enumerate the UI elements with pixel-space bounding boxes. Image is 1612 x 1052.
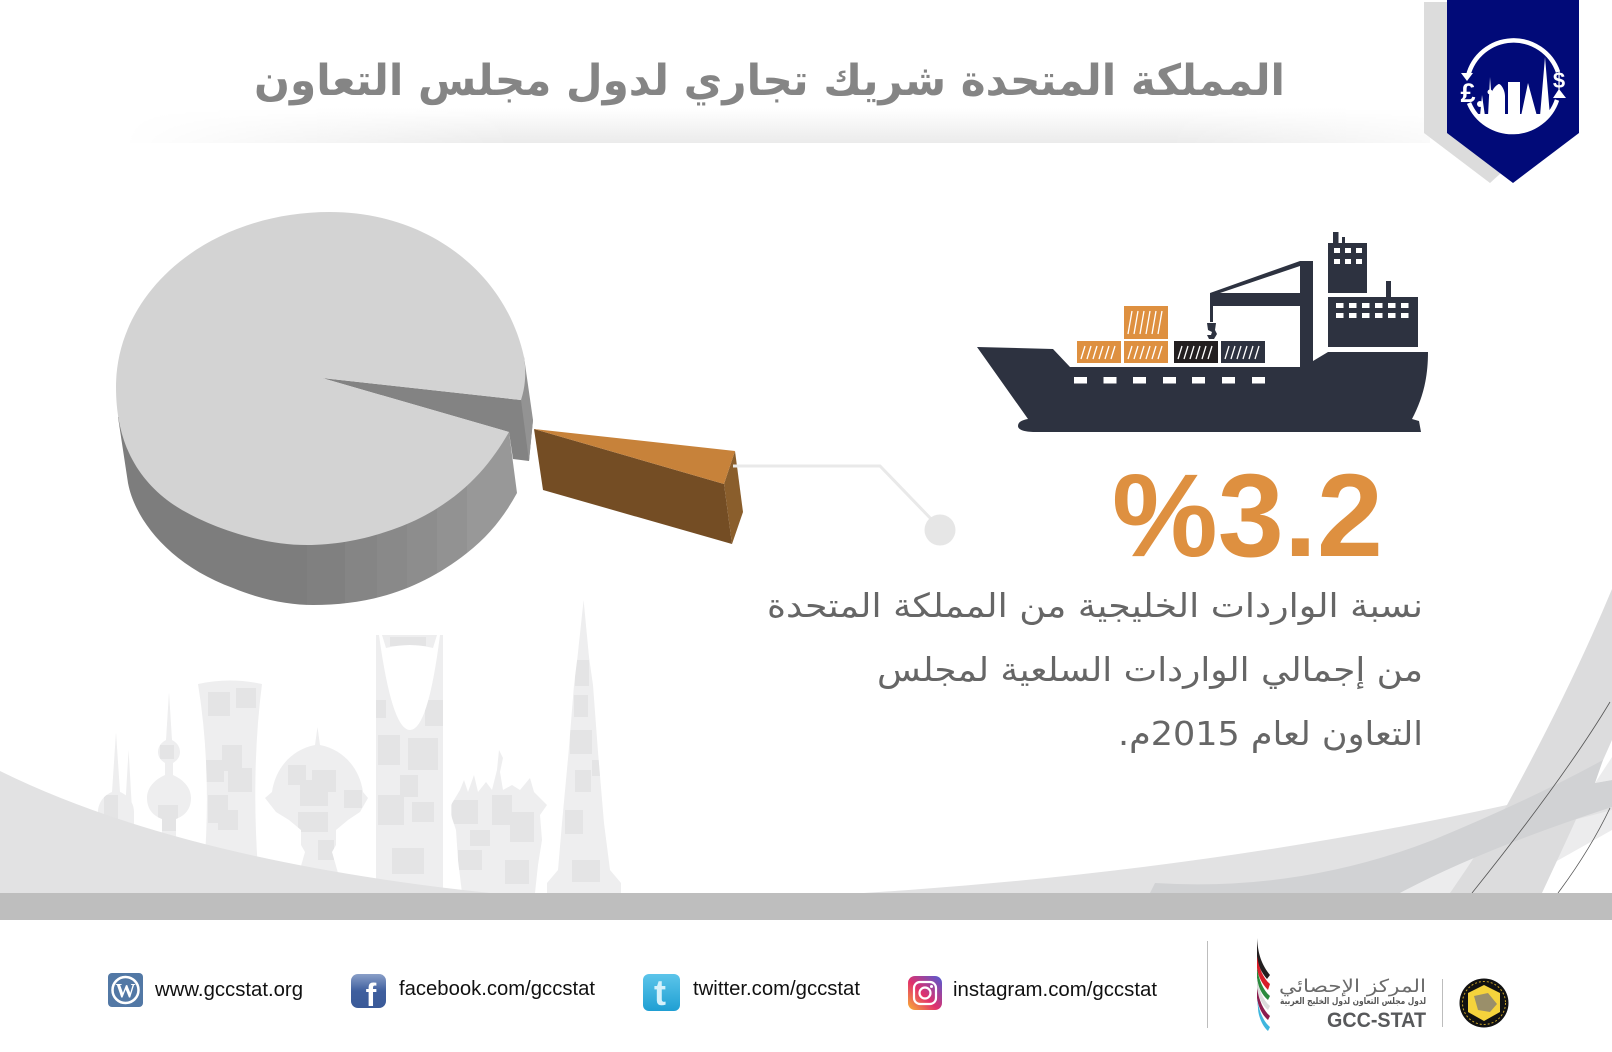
logo ribbons: [1257, 938, 1270, 1031]
pie chart: [116, 212, 743, 605]
description text: نسبة الواردات الخليجية من المملكة المتحدة: [767, 586, 1423, 625]
icon: skyline with trade arrows: £: [1460, 78, 1476, 108]
footer social links: [108, 972, 1157, 1013]
title: المملكة المتحدة شريك تجاري لدول مجلس التعاون: [254, 56, 1285, 106]
pie top surface: [116, 212, 525, 545]
logo arabic subtitle: لدول مجلس التعاون لدول الخليج العربية: [1280, 997, 1426, 1007]
containers: [1077, 306, 1265, 363]
GCC-STAT logo: [1207, 938, 1508, 1032]
icon: facebook: f: [366, 977, 377, 1013]
description text: التعاون لعام 2015م.: [1118, 714, 1423, 753]
icon: wordpress: W: [116, 980, 136, 1002]
link: twitter: twitter.com/gccstat: [693, 978, 860, 1000]
description text: من إجمالي الواردات السلعية لمجلس: [877, 650, 1423, 690]
link: website: www.gccstat.org: [154, 979, 303, 1001]
crane hook: [1207, 323, 1217, 339]
link: facebook: facebook.com/gccstat: [399, 978, 595, 1000]
connector line and dot: [733, 466, 956, 546]
logo arabic name: المركز الإحصائي: [1279, 976, 1426, 997]
skyline silhouette: [90, 590, 630, 893]
pie gap walls: [322, 378, 533, 461]
icon: facebook: [351, 974, 386, 1013]
ship hull and crane: [977, 261, 1428, 432]
icon: wordpress: [108, 973, 143, 1007]
ship windows: [1074, 248, 1408, 384]
bottom right swooshes: [864, 589, 1612, 893]
icon: cargo ship: [977, 232, 1428, 432]
pie side wall: [118, 380, 517, 605]
bottom left curve: [0, 771, 490, 893]
title underline sweep: [287, 122, 1374, 143]
GCC emblem: [1460, 978, 1508, 1028]
ship bridge: [1328, 232, 1418, 347]
icon: twitter: [643, 972, 680, 1013]
icon: instagram: [908, 976, 942, 1010]
icon: skyline with trade arrows: [1460, 40, 1566, 132]
icon: twitter: t: [654, 972, 666, 1013]
exploded slice: UK share: [534, 429, 743, 544]
description text: [767, 586, 1423, 753]
big percentage: %3.2: [1112, 450, 1383, 582]
link: instagram: instagram.com/gccstat: [953, 979, 1157, 1001]
icon: skyline with trade arrows: $: [1553, 68, 1565, 93]
banner badge: [1424, 0, 1579, 183]
footer band: [0, 893, 1612, 920]
logo latin name: GCC-STAT: [1327, 1009, 1426, 1032]
